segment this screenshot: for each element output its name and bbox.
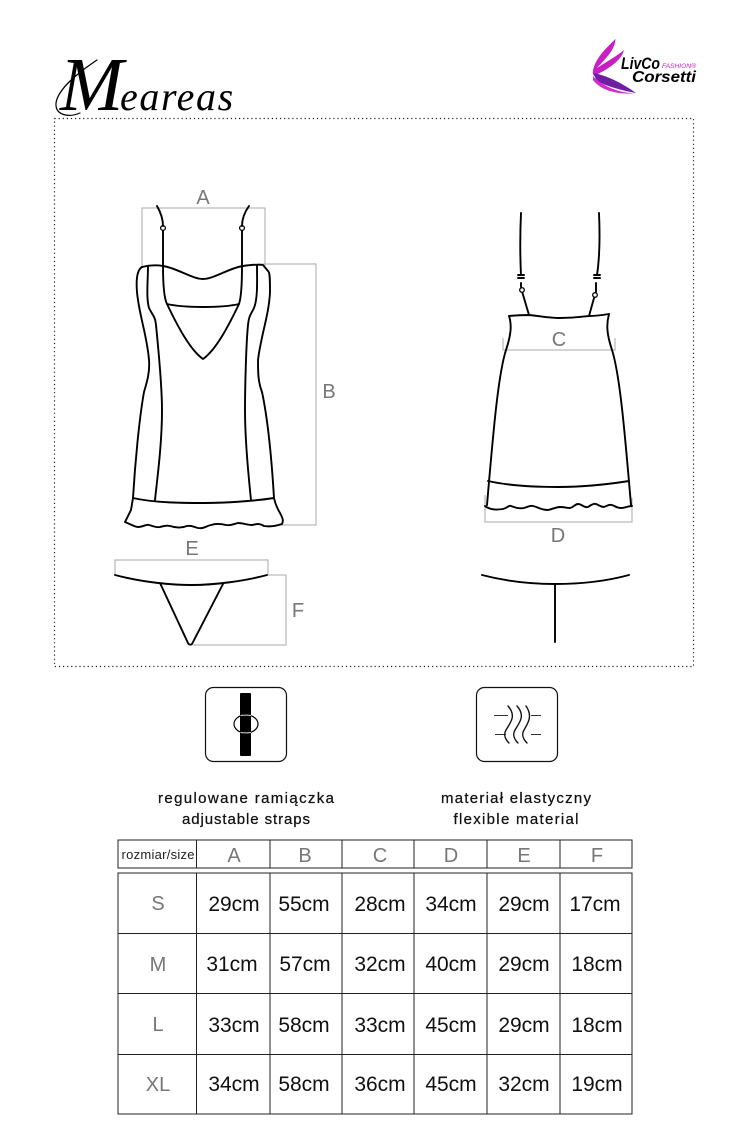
table header: rozmiar/size xyxy=(122,847,194,862)
logo: LivCo Corsetti: FASHION® xyxy=(662,63,697,70)
row L: 33cm xyxy=(208,1014,260,1037)
measure B: B xyxy=(322,381,336,403)
measure D: D xyxy=(551,525,565,547)
row L: L xyxy=(152,1014,164,1036)
row XL: 58cm xyxy=(278,1073,330,1096)
table header xyxy=(118,840,632,868)
caption: flexible material: materiał elastyczny xyxy=(441,790,592,807)
caption: adjustable straps: adjustable straps xyxy=(182,811,310,828)
table header: E xyxy=(517,845,531,867)
row M: 18cm xyxy=(571,953,623,976)
table body grid xyxy=(118,873,632,1114)
measure A xyxy=(142,187,265,266)
back thong outline xyxy=(482,575,629,642)
logo: LivCo Corsetti: LivCo xyxy=(621,54,660,73)
row S xyxy=(151,893,621,916)
row M: M xyxy=(150,954,166,976)
caption: flexible material: flexible material xyxy=(454,811,578,828)
row S: 17cm xyxy=(569,893,621,916)
size table xyxy=(118,840,632,1114)
table header: C xyxy=(373,845,387,867)
row S: S xyxy=(151,893,165,915)
row XL: 32cm xyxy=(498,1073,550,1096)
row M: 31cm xyxy=(206,953,258,976)
back chemise outline xyxy=(485,213,632,510)
row M: 32cm xyxy=(354,953,406,976)
front thong with measurements xyxy=(115,538,304,645)
row XL: XL xyxy=(146,1074,170,1096)
measure E xyxy=(115,538,268,574)
row L: 33cm xyxy=(354,1014,406,1037)
row S: 55cm xyxy=(278,893,330,916)
row L xyxy=(152,1014,623,1037)
row M: 29cm xyxy=(498,953,550,976)
row L: 29cm xyxy=(498,1014,550,1037)
table header: A xyxy=(227,845,241,867)
front chemise with measurements xyxy=(125,187,336,528)
measure A: A xyxy=(196,187,210,209)
row M: 40cm xyxy=(425,953,477,976)
caption: adjustable straps: regulowane ramiączka xyxy=(158,790,335,807)
caption: adjustable straps xyxy=(158,790,335,828)
title: M xyxy=(59,43,127,127)
front thong outline xyxy=(115,575,267,645)
measure E: E xyxy=(185,538,199,560)
logo: LivCo Corsetti xyxy=(593,39,697,94)
row S: 29cm xyxy=(498,893,550,916)
logo: LivCo Corsetti: Corsetti xyxy=(632,69,697,86)
row XL xyxy=(146,1073,623,1096)
title xyxy=(56,43,235,127)
table header: F xyxy=(591,845,603,867)
caption: flexible material xyxy=(441,790,592,828)
row M: 57cm xyxy=(279,953,331,976)
icon: adjustable strap xyxy=(206,688,286,762)
measure B xyxy=(258,264,336,525)
table header: B xyxy=(298,845,312,867)
row L: 58cm xyxy=(278,1014,330,1037)
row L: 18cm xyxy=(571,1014,623,1037)
row XL: 36cm xyxy=(354,1073,406,1096)
measure D xyxy=(485,495,632,547)
panel: garment diagrams frame xyxy=(54,118,694,666)
back chemise with measurements xyxy=(485,213,632,547)
measure C xyxy=(503,329,615,351)
row M xyxy=(150,953,623,976)
front chemise outline xyxy=(125,206,283,528)
row S: 29cm xyxy=(208,893,260,916)
row XL: 19cm xyxy=(571,1073,623,1096)
measure F: F xyxy=(292,600,304,622)
title: eareas xyxy=(120,74,235,119)
row XL: 45cm xyxy=(425,1073,477,1096)
row L: 45cm xyxy=(425,1014,477,1037)
measure F xyxy=(193,575,304,645)
icon: flexible material xyxy=(476,688,558,762)
measure C: C xyxy=(552,329,566,351)
row XL: 34cm xyxy=(208,1073,260,1096)
row S: 28cm xyxy=(354,893,406,916)
row S: 34cm xyxy=(425,893,477,916)
table header: D xyxy=(444,845,458,867)
